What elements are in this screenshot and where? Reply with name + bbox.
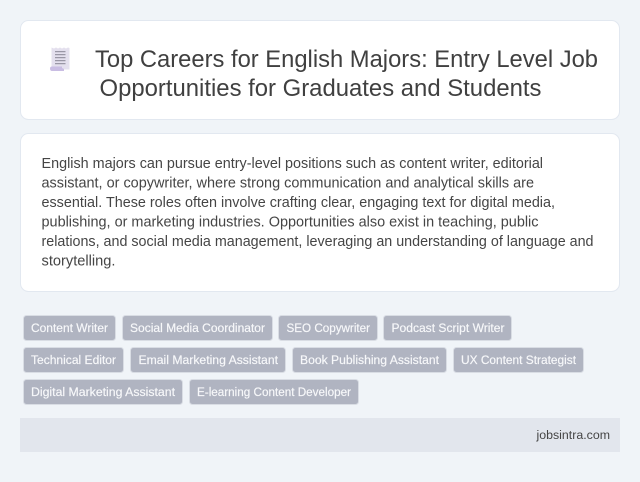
- tag: UX Content Strategist: [454, 348, 584, 372]
- text block: description: [42, 156, 594, 270]
- title: [95, 46, 598, 102]
- tag: Digital Marketing Assistant: Digital Marketing Assistant: [31, 385, 176, 399]
- text block: description: publishing, or marketing industries. Opportunities also exist in teaching, public: [42, 214, 538, 230]
- tag: SEO Copywriter: SEO Copywriter: [286, 321, 370, 335]
- footer source: jobsintra.com: [536, 428, 610, 442]
- tag: Content Writer: [24, 316, 116, 340]
- tag: Podcast Script Writer: Podcast Script Writer: [392, 321, 504, 335]
- icon: paper scroll: [50, 48, 70, 71]
- tag: Social Media Coordinator: Social Media Coordinator: [130, 321, 265, 335]
- tag: E-learning Content Developer: E-learning Content Developer: [197, 385, 351, 399]
- text block: description: relations, and social media management, leveraging an understanding of language and: [42, 234, 594, 250]
- footer bar: [20, 418, 620, 452]
- text block: description: essential. These roles often involve crafting clear, engaging text for digital media,: [42, 195, 555, 211]
- text block: description: storytelling.: [42, 254, 116, 270]
- title: Opportunities for Graduates and Students: [100, 75, 542, 102]
- tag: Technical Editor: Technical Editor: [31, 353, 116, 367]
- panel: description: [20, 134, 620, 292]
- tag: SEO Copywriter: [278, 316, 378, 340]
- tag: Digital Marketing Assistant: [24, 380, 182, 404]
- tag: Book Publishing Assistant: Book Publishing Assistant: [300, 353, 440, 367]
- tag list: [24, 316, 584, 404]
- tag: Podcast Script Writer: [384, 316, 512, 340]
- panel: title card: [20, 20, 620, 120]
- tag: Content Writer: Content Writer: [31, 321, 108, 335]
- text block: description: English majors can pursue entry-level positions such as content writer, editorial: [42, 156, 543, 172]
- tag: Social Media Coordinator: [122, 316, 272, 340]
- tag: UX Content Strategist: UX Content Strategist: [461, 353, 577, 367]
- tag: Book Publishing Assistant: [292, 348, 446, 372]
- title: Top Careers for English Majors: Entry Level Job: [95, 46, 598, 73]
- text block: description: assistant, or copywriter, where strong communication and analytical skills are: [42, 176, 534, 192]
- tag: Email Marketing Assistant: [130, 348, 286, 372]
- tag: E-learning Content Developer: [190, 380, 358, 404]
- tag: Technical Editor: [24, 348, 124, 372]
- tag: Email Marketing Assistant: Email Marketing Assistant: [138, 353, 279, 367]
